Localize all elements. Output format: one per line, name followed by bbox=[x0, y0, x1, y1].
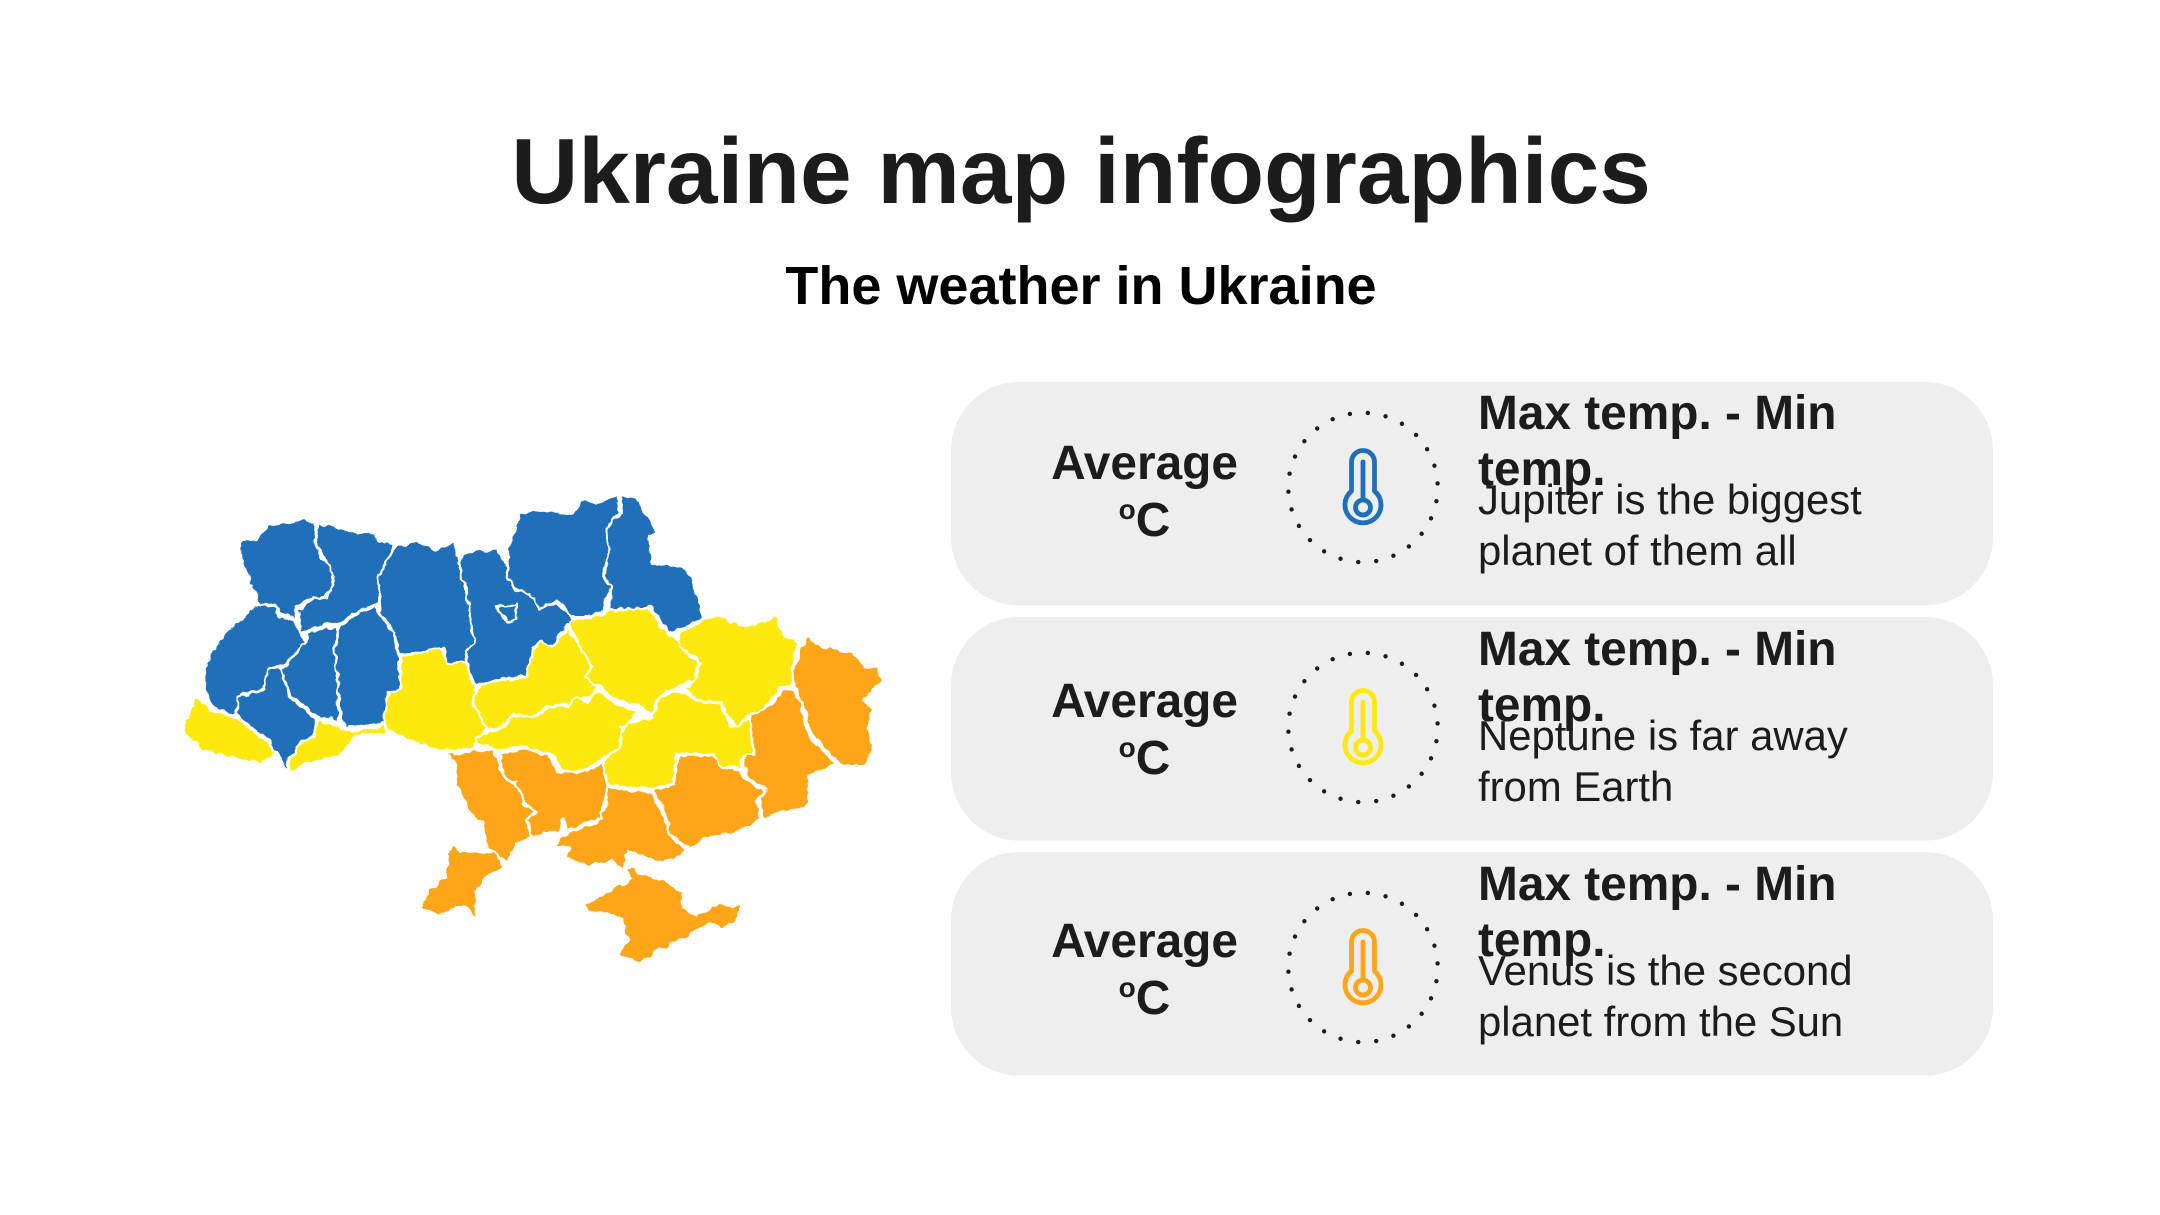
text: description: Neptune is far away bbox=[1478, 712, 1848, 759]
icon: orange thermometer bbox=[1345, 931, 1381, 1003]
text: max and min temperature: temp. bbox=[1478, 914, 1605, 967]
panel: blue row bbox=[951, 382, 1993, 606]
icon: dotted circle bbox=[1288, 653, 1438, 802]
average label: o bbox=[1119, 494, 1136, 525]
average label: Average bbox=[1051, 675, 1238, 728]
average label: o bbox=[1119, 732, 1136, 763]
text: description: Jupiter is the biggest bbox=[1478, 476, 1862, 523]
average label: o bbox=[1119, 972, 1136, 1003]
text: description: Venus is the second bbox=[1478, 947, 1853, 994]
text: description: planet of them all bbox=[1478, 527, 1797, 574]
icon: yellow thermometer bbox=[1345, 690, 1381, 763]
text: max and min temperature: Max temp. - Min bbox=[1478, 387, 1836, 440]
orange regions bbox=[422, 637, 883, 960]
average label: Average bbox=[1051, 915, 1238, 968]
average label: C bbox=[1136, 732, 1170, 785]
text: max and min temperature: Max temp. - Min bbox=[1478, 858, 1836, 911]
title: Ukraine map infographics bbox=[511, 119, 1651, 223]
icon: blue thermometer bbox=[1345, 450, 1381, 523]
map of Ukraine bbox=[182, 495, 883, 960]
blue regions bbox=[204, 495, 703, 772]
text: max and min temperature: Max temp. - Min bbox=[1478, 623, 1836, 676]
subtitle: The weather in Ukraine bbox=[785, 256, 1377, 316]
text: max and min temperature: temp. bbox=[1478, 443, 1605, 496]
text: max and min temperature: temp. bbox=[1478, 679, 1605, 732]
average label: C bbox=[1136, 494, 1170, 547]
icon: dotted circle bbox=[1288, 413, 1438, 562]
average label: C bbox=[1136, 972, 1170, 1025]
average label: Average bbox=[1051, 437, 1238, 490]
yellow regions bbox=[182, 608, 798, 790]
panel: yellow row bbox=[951, 617, 1993, 840]
text: description: from Earth bbox=[1478, 763, 1673, 810]
icon: dotted circle bbox=[1288, 893, 1438, 1042]
panel: orange row bbox=[951, 852, 1993, 1076]
text: description: planet from the Sun bbox=[1478, 998, 1843, 1045]
